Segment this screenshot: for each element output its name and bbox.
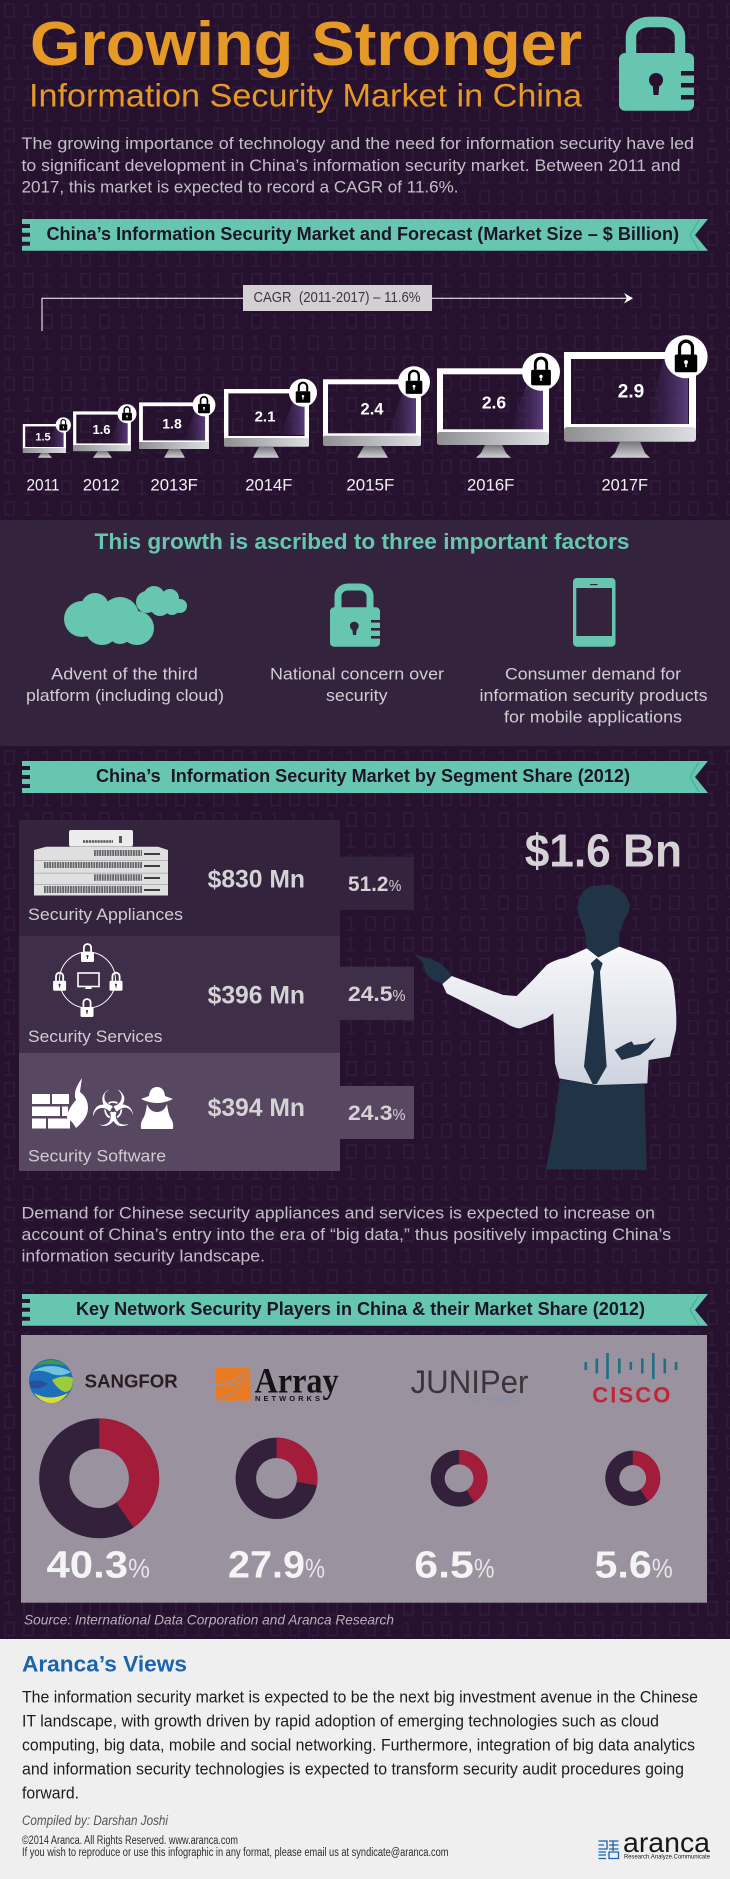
views body: IT landscape, with growth driven by rapid adoption of emerging technologies such as cloud [22,1713,659,1731]
icon: mobile phone [573,578,616,647]
appliances share: 51.2 [348,873,388,896]
monitor 2011: 1.5 [35,432,51,444]
text: big data: information security landscape. [22,1247,265,1266]
heading ribbon: segment share [22,761,708,793]
donut: Sangfor 40.3% [39,1418,159,1538]
year labels [26,477,648,495]
services share: % [392,988,406,1005]
copyright [22,1835,448,1859]
views body: and information security technologies is expected to transform security audit procedures going [22,1761,684,1779]
heading ribbon: segment share: China’s Information Security Market by Segment Share (2012) [96,766,630,786]
monitor 2015F: 2.4 [361,400,384,418]
monitor 2016F [437,353,560,458]
total market callout: $1.6 Bn [525,825,682,877]
logo: Sangfor [29,1359,178,1403]
logo: Juniper Networks: JUNIPer [411,1364,529,1400]
share values: 27.9 [228,1545,305,1587]
share values: 40.3 [46,1545,128,1587]
donut: Cisco 5.6% [605,1451,660,1506]
year labels: 2015F [346,477,394,495]
year labels: 2011 [26,477,60,495]
illustration: businessman [415,885,676,1170]
donut: Array 27.9% [236,1438,318,1519]
services amount: $396 Mn [208,981,305,1009]
copyright: ©2014 Aranca. All Rights Reserved. www.aranca.com [22,1835,238,1847]
year labels: 2012 [83,477,120,495]
intro text: 2017, this market is expected to record a CAGR of 11.6%. [22,178,459,197]
logo: Sangfor: SANGFOR [85,1372,178,1392]
factor captions: platform (including cloud) [26,687,224,705]
monitor 2016F: 2.6 [482,392,506,412]
year labels: 2016F [467,477,514,495]
monitor 2015F [323,366,430,458]
heading ribbon: key players [22,1294,708,1326]
factor captions: information security products [480,687,708,705]
logo: Cisco [584,1353,677,1407]
heading ribbon: market and forecast [22,219,708,251]
factor captions: Consumer demand for [505,665,682,683]
share values: % [474,1554,494,1584]
heading ribbon: market and forecast: China’s Information Security Market and Forecast (Market Size – $ Billion) [46,224,679,244]
logo: Aranca: Research.Analyze.Communicate [624,1855,711,1861]
panel: Aranca's Views [0,1639,730,1879]
heading ribbon: key players: Key Network Security Players in China & their Market Share (2012) [76,1299,645,1319]
logo: Aranca: aranca [623,1827,710,1858]
views heading: Aranca’s Views [22,1652,187,1677]
monitor 2014F: 2.1 [255,409,275,426]
title [29,10,582,114]
year labels: 2013F [150,477,198,495]
services label: Security Services [28,1028,162,1046]
appliances label: Security Appliances [28,906,183,924]
year labels: 2017F [602,477,648,495]
share values: 6.5 [414,1545,474,1587]
software share: 24.3 [348,1102,392,1125]
software share: % [392,1107,406,1124]
monitor 2012: 1.6 [92,422,111,437]
panel: three factors [0,520,730,746]
year labels: 2014F [245,477,292,495]
icon: padlock [330,587,380,647]
views body [22,1689,698,1803]
factor captions: National concern over [270,665,445,683]
factor captions [26,665,708,727]
donut: Juniper 6.5% [431,1450,487,1507]
factor captions: Advent of the third [51,665,198,683]
intro text: The growing importance of technology and the need for information security have led [22,134,694,153]
panel: security software [19,1053,414,1171]
title: Growing Stronger [30,10,582,79]
share values [46,1545,673,1587]
monitor 2013F: 1.8 [162,415,182,431]
monitor 2011 [23,417,71,458]
icon: padlock [619,22,694,111]
views body: computing, big data, mobile and social networking. Furthermore, integration of big data analytics [22,1737,695,1755]
logo: Juniper Networks: NETWORKS [468,1394,520,1404]
chart: monitors with market size [23,335,708,495]
intro text [22,134,694,197]
monitor 2013F [139,394,215,458]
CAGR arrow: CAGR (2011-2017) – 11.6% [254,289,420,306]
icon: network switches [34,830,168,896]
panel: security appliances [19,820,414,936]
donut charts [39,1418,660,1538]
services share: 24.5 [348,983,393,1006]
factors heading: This growth is ascribed to three important factors [94,529,630,554]
source note: Source: International Data Corporation and Aranca Research [24,1611,394,1627]
compiled by: Compiled by: Darshan Joshi [22,1813,169,1828]
software label: Security Software [28,1148,166,1166]
icon: firewall, biohazard, hacker: ☣ [91,1080,135,1138]
intro text: to significant development in China’s information security market. Between 2011 and [22,156,680,175]
share values: % [305,1554,325,1584]
share values: % [128,1554,150,1584]
logo: Array Networks [216,1361,339,1403]
icon: locks around monitor [53,944,122,1017]
text: big data: Demand for Chinese security appliances and services is expected to increase on [22,1203,655,1222]
views body: forward. [22,1785,79,1803]
CAGR arrow [42,285,633,331]
copyright: If you wish to reproduce or use this infographic in any format, please email us at syndicate@aranca.com [22,1847,448,1859]
logo: Array Networks: NETWORKS [255,1394,320,1403]
text: big data [22,1203,671,1266]
logo: Cisco: CISCO [592,1382,670,1407]
appliances amount: $830 Mn [208,865,305,893]
factor captions: security [326,687,388,705]
icon: clouds [64,586,187,645]
share values: % [652,1554,673,1584]
monitor 2014F [224,379,317,458]
software amount: $394 Mn [208,1094,305,1122]
share values: 5.6 [594,1545,652,1587]
factor captions: for mobile applications [504,709,682,727]
monitor 2012 [73,404,136,458]
text: big data: account of China’s entry into the era of “big data,” thus positively impacting China’s [22,1225,671,1244]
monitor 2017F: 2.9 [618,382,644,403]
views body: The information security market is expected to be the next big investment avenue in the Chinese [22,1689,698,1707]
panel: security services [19,936,414,1053]
logo: Array Networks: Array [255,1361,339,1401]
monitor 2017F [564,335,708,458]
appliances share: % [389,878,401,895]
panel: network players [21,1335,707,1603]
title: Information Security Market in China [29,78,582,114]
icon: firewall, biohazard, hacker [32,1078,173,1138]
